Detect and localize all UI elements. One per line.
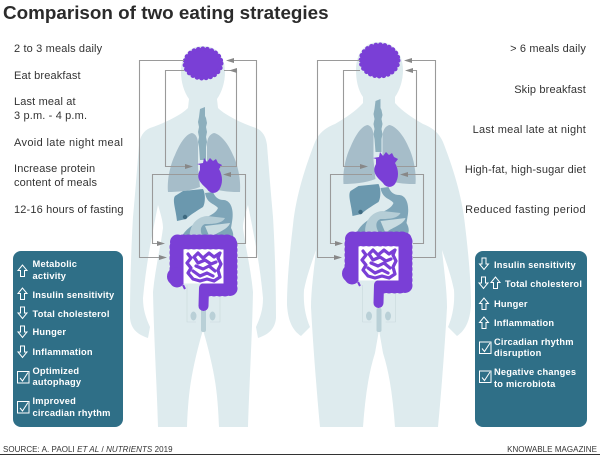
- right habit: meals: > 6 meals daily: [510, 43, 586, 55]
- left brain: [185, 49, 221, 78]
- right organs: liver, stomach, gut: [349, 184, 409, 235]
- panel: left benefits: Inflammation: [32, 347, 93, 357]
- panel: left benefits: circadian rhythm: [32, 408, 111, 418]
- left body silhouette: [130, 46, 276, 427]
- panel: right consequences: [475, 251, 587, 427]
- right organs: lungs and trachea: [343, 99, 416, 184]
- right habit: diet: High-fat, high-sugar diet: [465, 164, 586, 176]
- panel: left benefits: Total cholesterol: [32, 309, 110, 319]
- left organs: liver, stomach, gut: [174, 189, 233, 240]
- title: Comparison of two eating strategies: [3, 2, 329, 23]
- right body silhouette: [287, 42, 471, 427]
- left habit: protein: [14, 163, 97, 189]
- left habit: fasting: 12-16 hours of fasting: [14, 204, 124, 216]
- right colon and small intestine: [342, 239, 405, 303]
- right organs: pelvis: [362, 285, 396, 332]
- panel: right consequences: Circadian rhythm: [494, 337, 574, 347]
- panel: left benefits: autophagy: [32, 377, 82, 387]
- left connector arrows: [140, 58, 256, 260]
- left habit: breakfast: Eat breakfast: [14, 70, 81, 82]
- panel: right consequences: to microbiota: [494, 379, 556, 389]
- left habit: protein: Increase protein: [14, 163, 95, 175]
- panel: right consequences: Insulin sensitivity: [494, 260, 576, 270]
- panel: left benefits: Optimized: [32, 366, 79, 376]
- left habit: protein: content of meals: [14, 177, 97, 189]
- left habit: last meal: 3 p.m. - 4 p.m.: [14, 110, 87, 122]
- panel: left benefits: [13, 251, 123, 427]
- panel: right consequences: Total cholesterol: [505, 279, 582, 289]
- right heart: [373, 152, 398, 187]
- panel: right consequences: Hunger: [494, 299, 528, 309]
- left habit: late night: Avoid late night meal: [14, 137, 123, 149]
- panel: left benefits: Insulin sensitivity: [32, 290, 115, 300]
- left heart: [197, 158, 222, 193]
- left habit: last meal: Last meal at: [14, 96, 76, 108]
- left organs: pelvis: [187, 285, 220, 332]
- right connector arrows: [318, 58, 436, 260]
- panel: left benefits: activity: [32, 271, 67, 281]
- right habit: fasting: Reduced fasting period: [465, 204, 586, 216]
- panel: right consequences: disruption: [494, 348, 542, 358]
- right habit: breakfast: Skip breakfast: [514, 84, 586, 96]
- panel: left benefits: Metabolic: [32, 259, 77, 269]
- panel: left benefits: Hunger: [32, 327, 66, 337]
- left habit: meals: 2 to 3 meals daily: [14, 43, 102, 55]
- left habit: last meal: [14, 96, 87, 122]
- source credit: SOURCE: A. PAOLI ET AL / NUTRIENTS 2019: [3, 445, 173, 454]
- publisher credit: KNOWABLE MAGAZINE: [507, 445, 597, 454]
- right brain: [361, 45, 398, 76]
- panel: left benefits: Improved: [32, 396, 76, 406]
- panel: right consequences: Negative changes: [494, 367, 576, 377]
- footer rule: [0, 454, 600, 455]
- panel: right consequences: Inflammation: [494, 318, 554, 328]
- right habit: last meal: Last meal late at night: [473, 124, 586, 136]
- left organs: lungs and trachea: [168, 107, 240, 192]
- left colon and small intestine: [167, 242, 230, 306]
